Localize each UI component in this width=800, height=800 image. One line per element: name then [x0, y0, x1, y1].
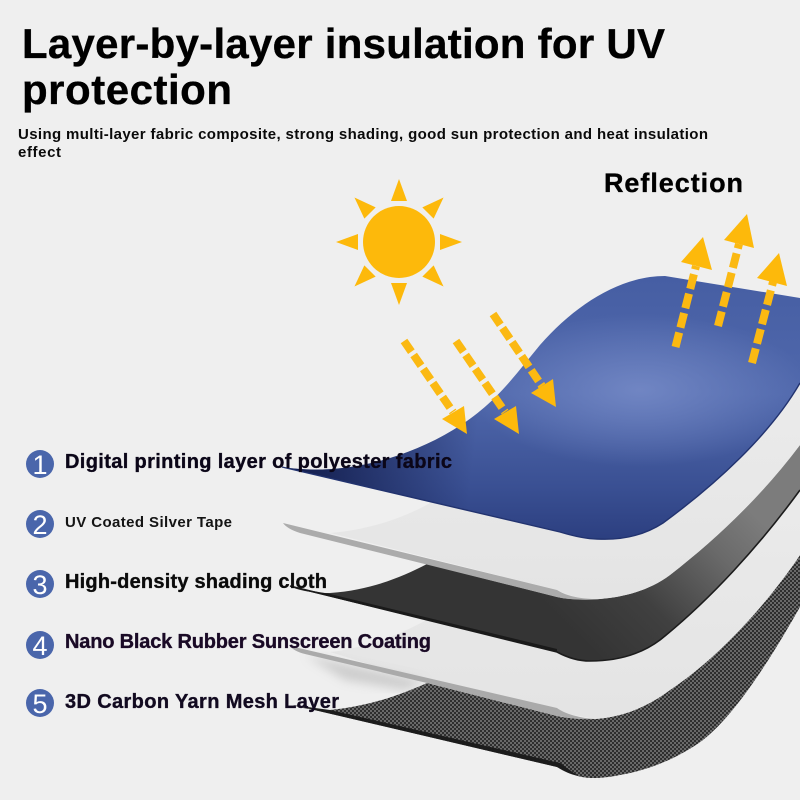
label 3	[26, 570, 327, 600]
arrows: incoming sunlight	[404, 314, 556, 434]
title: protection	[22, 66, 232, 113]
title: Layer-by-layer insulation for UV	[22, 20, 665, 67]
icon: sun	[336, 179, 462, 305]
label 3: High-density shading cloth	[65, 571, 327, 593]
label 5: 5	[32, 689, 48, 719]
layer 1: digital printing polyester fabric	[282, 276, 800, 539]
label 1: Digital printing layer of polyester fabric	[65, 451, 452, 473]
label 2: UV Coated Silver Tape	[65, 514, 232, 531]
label 4	[26, 631, 431, 661]
label 5	[26, 689, 339, 719]
title	[22, 20, 665, 113]
subtitle	[18, 126, 708, 161]
reflection heading: Reflection	[604, 168, 743, 198]
layer 2: UV coated silver tape	[283, 330, 800, 599]
label 1	[26, 450, 452, 480]
label 3: 3	[32, 570, 48, 600]
layer 5: 3D carbon yarn mesh	[293, 555, 800, 778]
subtitle: effect	[18, 144, 61, 161]
label 4: Nano Black Rubber Sunscreen Coating	[65, 631, 431, 653]
layer 3: high-density shading cloth	[290, 445, 800, 661]
label 2	[26, 510, 232, 540]
label 5: 3D Carbon Yarn Mesh Layer	[65, 691, 339, 713]
label 2: 2	[32, 510, 48, 540]
label 1: 1	[32, 450, 48, 480]
subtitle: Using multi-layer fabric composite, strong shading, good sun protection and heat insulation	[18, 126, 708, 143]
label 4: 4	[32, 631, 48, 661]
layer 4: nano black rubber coating	[290, 400, 800, 719]
arrows: reflected sunlight	[676, 214, 787, 363]
